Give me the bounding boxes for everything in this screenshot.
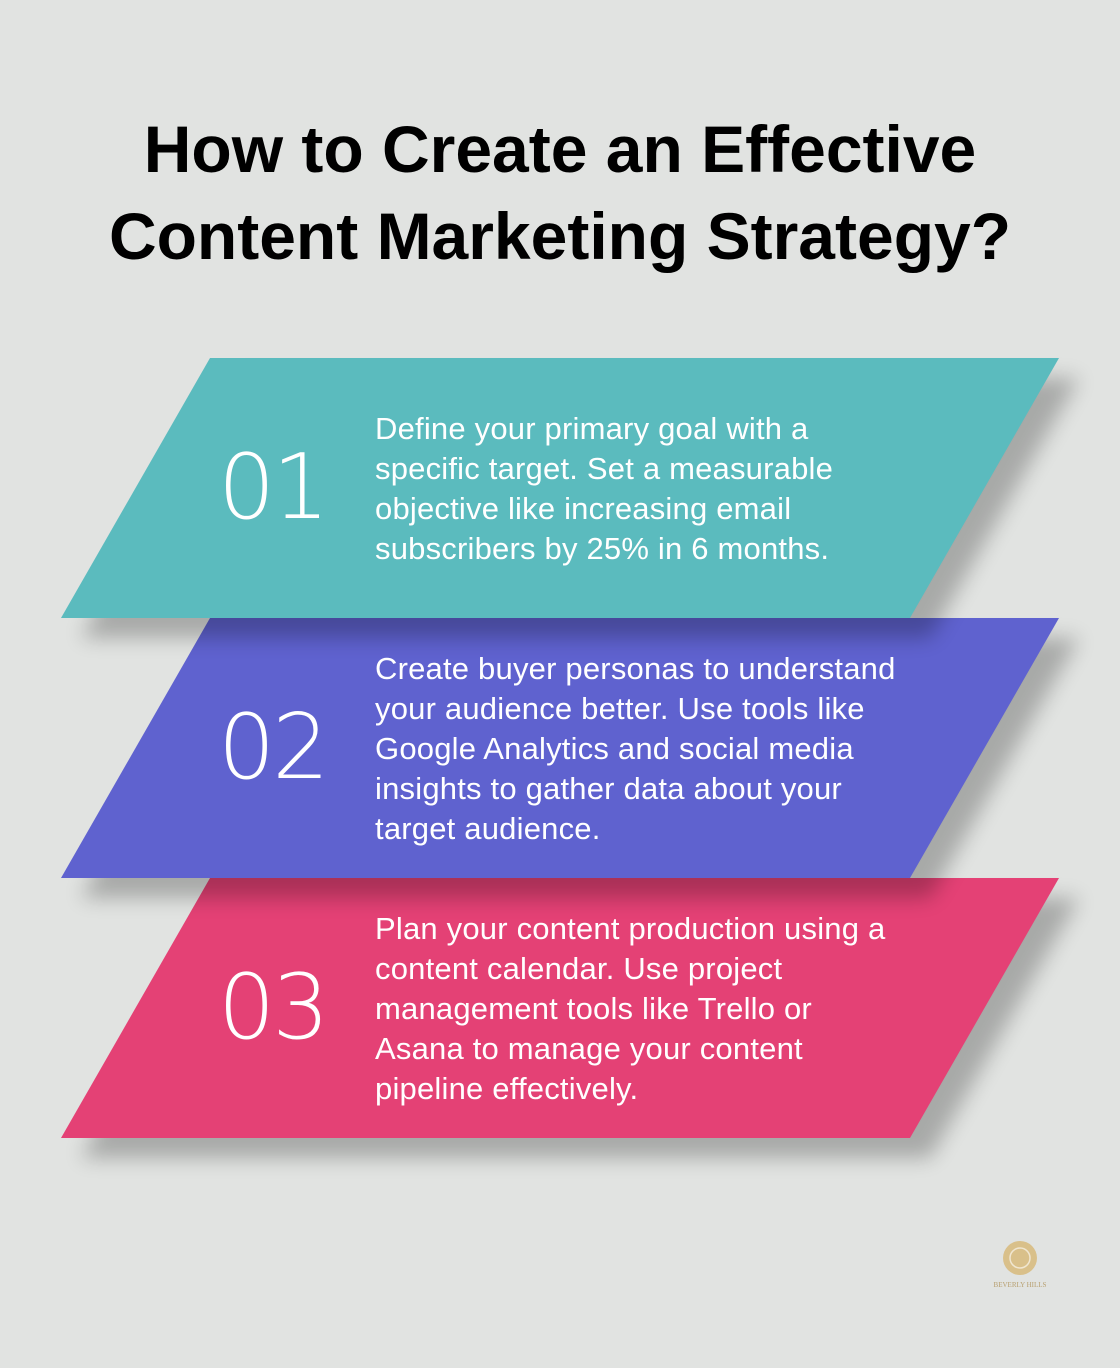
shape: panel 1 <box>61 358 1079 638</box>
title: How to Create an Effective <box>144 112 976 186</box>
shape: panel 2 <box>61 618 1079 898</box>
panel 1 text: Define your primary goal with a specific target. Set a measurable objective like increasing email subscribers by 25% in 6 months. <box>375 411 833 566</box>
panel 2 number: 02 <box>218 695 327 800</box>
title <box>109 112 1011 273</box>
panel 2 text: Create buyer personas to understand your audience better. Use tools like Google Analytics and social media insights to gather data about your target audience. <box>375 651 896 846</box>
panel 3 number: 03 <box>218 955 327 1060</box>
panel 3 text: Plan your content production using a content calendar. Use project management tools like Trello or Asana to manage your content pipeline effectively. <box>375 911 885 1106</box>
icon: logo <box>994 1241 1047 1289</box>
title: Content Marketing Strategy? <box>109 199 1011 273</box>
shape: panel 3 <box>61 878 1079 1158</box>
icon: logo: BEVERLY HILLS <box>994 1281 1047 1289</box>
panel 1 number: 01 <box>218 435 327 540</box>
